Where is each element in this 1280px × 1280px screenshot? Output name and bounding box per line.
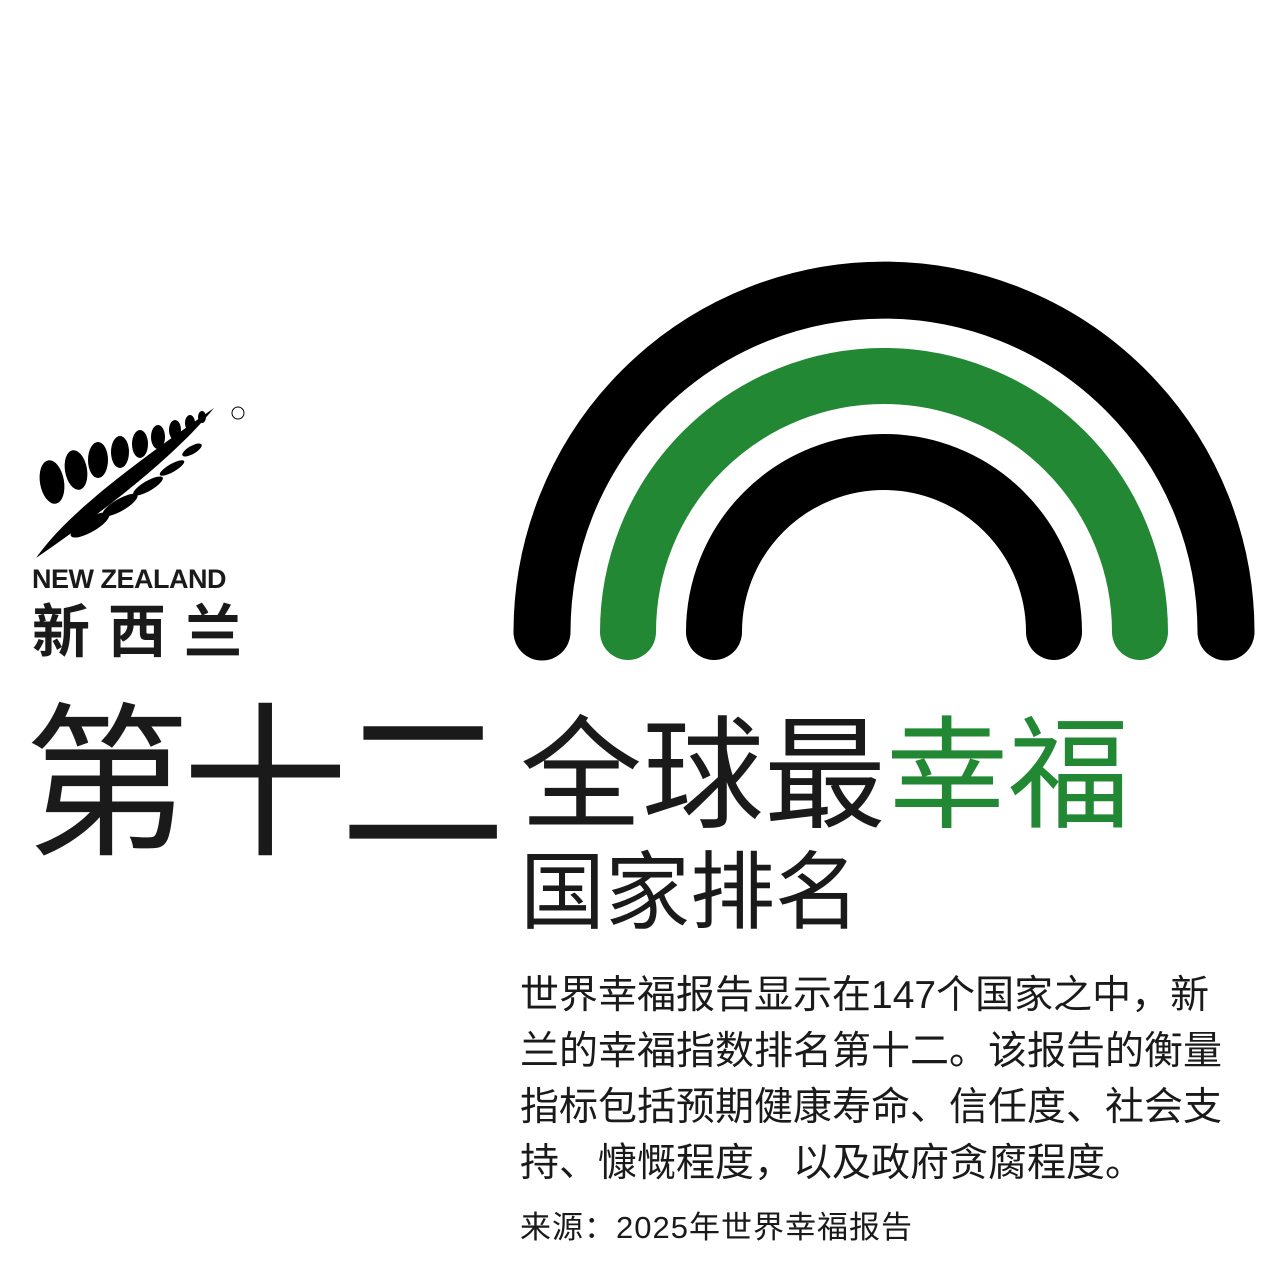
description paragraph bbox=[520, 974, 1222, 1185]
heading bbox=[520, 708, 1130, 941]
logo text: 新西兰: 新西兰 bbox=[32, 600, 260, 665]
icon: fern bbox=[36, 406, 244, 558]
arc: green bbox=[628, 376, 1140, 632]
heading: 全球最幸福 bbox=[520, 708, 1130, 844]
logo text: NEW ZEALAND: NEW ZEALAND bbox=[32, 564, 226, 594]
description paragraph: 世界幸福报告显示在147个国家之中，新 bbox=[520, 974, 1209, 1017]
description paragraph: 兰的幸福指数排名第十二。该报告的衡量 bbox=[520, 1030, 1222, 1073]
description paragraph: 持、慷慨程度，以及政府贪腐程度。 bbox=[520, 1142, 1144, 1185]
description paragraph: 指标包括预期健康寿命、信任度、社会支 bbox=[520, 1086, 1222, 1129]
source: 来源：2025年世界幸福报告 bbox=[520, 1210, 913, 1245]
arc: inner black bbox=[714, 462, 1054, 632]
arc: outer black bbox=[542, 290, 1226, 632]
big rank: 第十二: 第十二 bbox=[24, 693, 498, 878]
logo: New Zealand fern bbox=[32, 406, 260, 665]
heading: 国家排名 bbox=[520, 846, 860, 941]
